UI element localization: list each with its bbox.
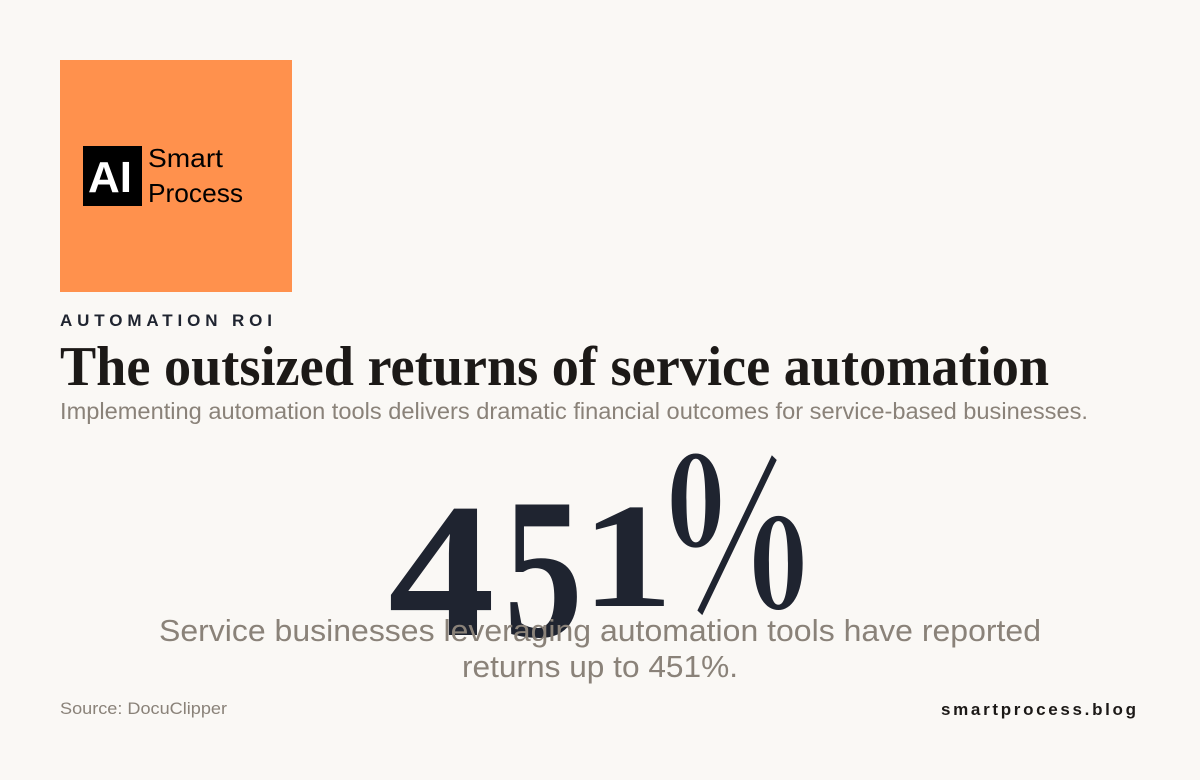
title: The outsized returns of service automation <box>60 336 1049 398</box>
logo wordmark <box>148 143 243 208</box>
subtitle: Implementing automation tools delivers dramatic financial outcomes for service-based businesses. <box>60 398 1088 424</box>
caption: Service businesses leveraging automation tools have reported <box>159 613 1041 648</box>
big number: 451% <box>388 375 808 681</box>
caption <box>159 613 1041 684</box>
big number: 451%: 1 <box>581 474 673 639</box>
logo wordmark: Process <box>148 178 243 208</box>
big number: 451%: % <box>666 375 808 667</box>
icon: AI black square: AI <box>88 153 132 202</box>
big number: 451%: 4 <box>388 464 495 677</box>
logo wordmark: Smart <box>148 143 224 173</box>
icon: AI black square <box>83 146 142 206</box>
eyebrow label: AUTOMATION ROI <box>60 311 272 330</box>
big number: 451%: 5 <box>504 458 583 681</box>
site url: smartprocess.blog <box>941 700 1136 719</box>
source note: Source: DocuClipper <box>60 699 227 718</box>
caption: returns up to 451%. <box>462 649 738 684</box>
logo panel <box>60 60 292 292</box>
